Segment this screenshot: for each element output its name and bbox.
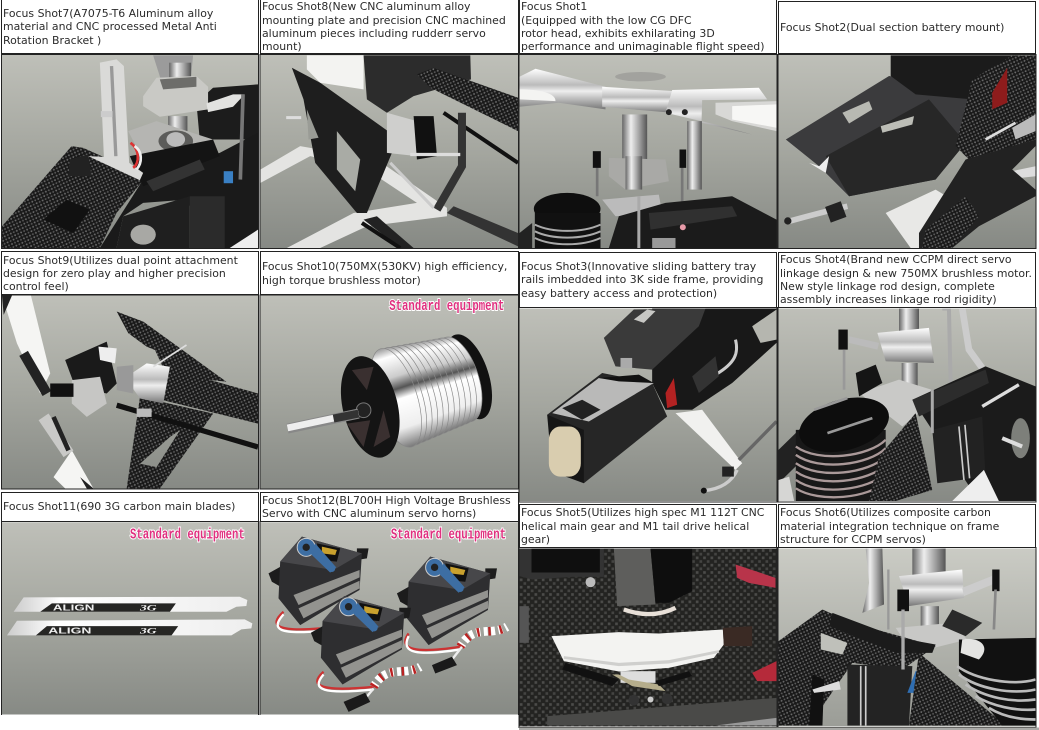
panel: Focus Shot1 photo bbox=[519, 53, 782, 253]
panel: Focus Shot9 photo bbox=[0, 293, 263, 494]
frame and canopy bbox=[652, 308, 776, 410]
tail servo bbox=[387, 113, 417, 156]
caption: Focus Shot8: aluminum pieces including rudderr servo bbox=[262, 27, 486, 40]
blade lower: 3G bbox=[138, 626, 158, 636]
caption: Focus Shot8: mount) bbox=[262, 40, 302, 53]
caption: Focus Shot10: Focus Shot10(750MX(530KV) high efficiency, bbox=[262, 260, 507, 273]
frame bbox=[602, 195, 662, 216]
top window and servo bbox=[520, 548, 604, 580]
caption: Focus Shot10 bbox=[260, 251, 519, 295]
landing strut and skid bbox=[676, 410, 742, 470]
motor bbox=[959, 638, 1036, 726]
anti rotation bracket bbox=[88, 59, 143, 180]
caption: Focus Shot5: gear) bbox=[521, 533, 550, 546]
caption: Focus Shot1: performance and unimaginable flight speed) bbox=[521, 40, 764, 53]
caption: Focus Shot10: high torque brushless motor) bbox=[262, 274, 421, 286]
cyclic servo bbox=[932, 416, 986, 483]
mast and swashplate bbox=[622, 114, 647, 160]
caption: Focus Shot7: Rotation Bracket ) bbox=[3, 34, 101, 47]
caption: Focus Shot9: control feel) bbox=[3, 280, 69, 293]
carbon tail boom bbox=[417, 68, 518, 131]
blade upper bbox=[14, 597, 247, 612]
helical main gear bbox=[552, 630, 724, 672]
caption: Focus Shot5: helical main gear and M1 tail drive helical bbox=[521, 520, 749, 533]
motor bbox=[534, 193, 600, 225]
tail blades bbox=[2, 296, 50, 394]
black frame plate bbox=[292, 68, 392, 213]
blade upper: ALIGN bbox=[53, 602, 94, 612]
carbon frame background bbox=[519, 546, 782, 730]
caption: Focus Shot11 bbox=[1, 492, 259, 522]
panel: Focus Shot10 photo bbox=[257, 293, 524, 494]
red wires bbox=[666, 378, 677, 408]
caption: Focus Shot12: Servo with CNC aluminum servo horns) bbox=[262, 507, 476, 520]
gearbox bbox=[65, 342, 117, 394]
caption: Focus Shot1: Focus Shot1 bbox=[521, 0, 587, 13]
servo wires bbox=[992, 68, 1007, 109]
caption: Focus Shot6: material integration technique on frame bbox=[780, 520, 999, 533]
battery tray bbox=[552, 378, 654, 421]
black side rail and chassis bbox=[100, 133, 258, 248]
caption: Focus Shot6: Focus Shot6(Utilizes composite carbon bbox=[780, 506, 991, 519]
panel: Focus Shot4 photo bbox=[776, 306, 1039, 507]
boom collar bbox=[132, 363, 170, 404]
blade lower: ALIGN bbox=[48, 626, 91, 636]
carbon frame bbox=[2, 146, 146, 248]
caption: Focus Shot1 bbox=[519, 0, 777, 54]
carbon vertical fin bbox=[117, 312, 226, 382]
caption: Focus Shot7: Focus Shot7(A7075-T6 Aluminum alloy bbox=[3, 7, 213, 20]
panel: Focus Shot7 photo bbox=[0, 53, 263, 253]
servo bbox=[847, 664, 912, 726]
mast and rotor base bbox=[862, 548, 884, 613]
caption: Focus Shot8: mounting plate and precision CNC machined bbox=[262, 14, 506, 27]
caption: Focus Shot1: rotor head, exhibits exhilarating 3D bbox=[521, 27, 715, 40]
caption: Focus Shot7: material and CNC processed Metal Anti bbox=[3, 20, 217, 33]
caption: Focus Shot7 bbox=[1, 0, 259, 54]
caption: Focus Shot4: assembly increases linkage rod rigidity) bbox=[780, 293, 997, 306]
white landing skid frame bbox=[260, 146, 447, 248]
flybar disc bbox=[615, 72, 666, 81]
carbon side frame bbox=[956, 55, 1036, 160]
panel: Focus Shot5 photo bbox=[519, 546, 782, 730]
servo bbox=[190, 196, 225, 248]
lower rail bbox=[547, 698, 776, 726]
blade lower bbox=[7, 619, 252, 636]
caption: Focus Shot2 bbox=[778, 1, 1036, 54]
black rail bbox=[829, 613, 936, 653]
brushless motor bbox=[288, 329, 501, 464]
linkage rod bbox=[897, 590, 909, 611]
caption: Focus Shot11: Focus Shot11(690 3G carbon main blades) bbox=[3, 500, 235, 513]
servo plate bbox=[859, 380, 942, 426]
pinion and bracket bbox=[620, 671, 656, 683]
black chassis bbox=[912, 366, 1036, 501]
panel: Focus Shot8 photo bbox=[257, 53, 524, 253]
carbon frame right bbox=[909, 653, 1006, 726]
blade upper: 3G bbox=[138, 602, 158, 612]
servo back right bbox=[397, 557, 507, 673]
skid bbox=[789, 206, 847, 221]
caption: Focus Shot5 bbox=[519, 504, 777, 548]
carbon tail boom bbox=[163, 367, 258, 424]
caption: Focus Shot5: Focus Shot5(Utilizes high spec M1 112T CNC bbox=[521, 506, 764, 519]
servo back left bbox=[269, 537, 369, 632]
caption: Focus Shot4: New style linkage rod design, complete bbox=[780, 280, 995, 293]
caption: Focus Shot12: Focus Shot12(BL700H High Voltage Brushless bbox=[262, 494, 511, 507]
caption: Focus Shot4 bbox=[778, 252, 1036, 308]
caption: Focus Shot9: design for zero play and higher precision bbox=[3, 267, 226, 280]
caption: Focus Shot4: linkage design & new 750MX brushless motor. bbox=[780, 267, 1032, 280]
white skid struts bbox=[886, 190, 952, 248]
caption: Focus Shot6: structure for CCPM servos) bbox=[780, 533, 926, 546]
motor bbox=[796, 430, 886, 501]
panel: Focus Shot6 photo bbox=[776, 546, 1039, 730]
caption: Focus Shot3: Focus Shot3(Innovative sliding battery tray bbox=[521, 260, 756, 273]
caption: Focus Shot3: easy battery access and protection) bbox=[521, 287, 717, 300]
caption: Focus Shot6 bbox=[778, 504, 1036, 548]
white main gear bbox=[307, 55, 364, 89]
caption: Focus Shot9: Focus Shot9(Utilizes dual point attachment bbox=[3, 254, 238, 266]
battery tray bbox=[786, 76, 972, 196]
caption: Focus Shot8 bbox=[260, 0, 519, 54]
panel: Focus Shot11 photo bbox=[0, 520, 263, 720]
mast and head bbox=[899, 308, 919, 342]
battery bbox=[547, 373, 667, 483]
caption: Focus Shot9 bbox=[1, 251, 259, 295]
panel: Focus Shot3 photo bbox=[519, 306, 782, 507]
caption: Focus Shot3: rails imbedded into 3K side frame, providing bbox=[521, 273, 763, 286]
caption: Focus Shot1: (Equipped with the low CG DFC bbox=[521, 14, 692, 27]
panel: Focus Shot2 photo bbox=[776, 53, 1039, 253]
carbon frame left bbox=[778, 610, 936, 726]
caption: Focus Shot3 bbox=[519, 252, 777, 308]
panel: Focus Shot12 photo bbox=[257, 520, 524, 720]
caption: Focus Shot4: Focus Shot4(Brand new CCPM direct servo bbox=[780, 253, 1012, 266]
servo front bbox=[311, 596, 420, 712]
caption: Focus Shot2: Focus Shot2(Dual section battery mount) bbox=[780, 21, 1004, 34]
main shaft bbox=[153, 55, 193, 87]
rotor grips bbox=[520, 69, 606, 109]
caption: Focus Shot8: Focus Shot8(New CNC aluminum alloy bbox=[262, 0, 470, 13]
caption: Focus Shot12 bbox=[260, 492, 519, 522]
